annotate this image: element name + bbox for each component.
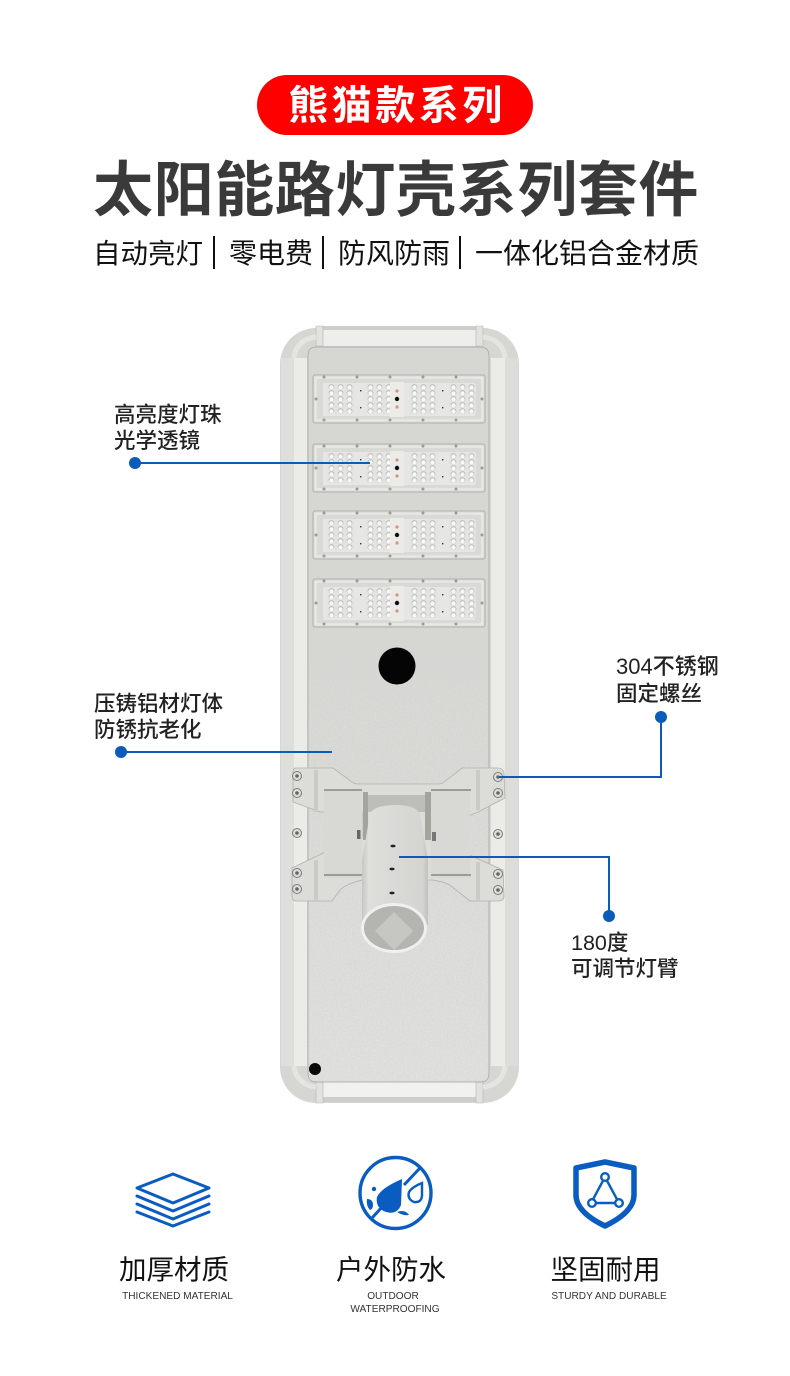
drain hole	[309, 1063, 321, 1075]
feature: sturdy and durable: 坚固耐用	[550, 1254, 660, 1285]
product: solar street light housing	[280, 326, 519, 1103]
title badge: 熊猫款系列: 熊猫款系列	[288, 84, 506, 128]
subtitle feature row: 零电费	[229, 238, 313, 269]
LED module 2	[313, 444, 485, 492]
callout: LED lens: 高亮度灯珠	[114, 403, 222, 427]
callout: stainless screws	[499, 654, 719, 777]
callout: stainless screws: 固定螺丝	[616, 682, 702, 706]
icon: no water	[360, 1158, 431, 1228]
feature: outdoor waterproofing: OUTDOOR	[367, 1291, 419, 1302]
feature: outdoor waterproofing	[336, 1158, 446, 1315]
light body frame	[280, 326, 519, 1103]
callout: LED lens	[114, 403, 370, 469]
callout: adjustable arm: 可调节灯臂	[571, 957, 679, 981]
title badge: 熊猫款系列	[257, 75, 533, 135]
callout: die-cast body	[94, 692, 332, 758]
icon: shield	[576, 1162, 634, 1226]
feature: thickened material	[119, 1174, 233, 1302]
subtitle feature row: 自动亮灯	[93, 238, 203, 269]
sensor hole	[378, 648, 416, 684]
LED module 3	[313, 511, 485, 559]
adjustable arm	[361, 792, 431, 953]
subtitle feature row: 防风防雨	[338, 238, 450, 269]
callout: die-cast body: 防锈抗老化	[94, 718, 202, 742]
LED module 1	[313, 375, 485, 423]
callout: die-cast body: 压铸铝材灯体	[94, 692, 224, 716]
feature: outdoor waterproofing: WATERPROOFING	[350, 1304, 440, 1315]
mounting bracket	[292, 768, 505, 901]
feature: thickened material: 加厚材质	[119, 1254, 229, 1285]
LED module 4	[313, 579, 485, 627]
feature: thickened material: THICKENED MATERIAL	[122, 1291, 233, 1302]
aluminium panel	[308, 347, 489, 1082]
callout: adjustable arm: 180度	[571, 931, 628, 955]
feature: sturdy and durable	[550, 1162, 667, 1302]
callout: adjustable arm	[399, 857, 679, 981]
subtitle feature row	[93, 236, 699, 269]
icon: layers	[137, 1174, 209, 1226]
callout: LED lens: 光学透镜	[114, 429, 200, 453]
subtitle feature row: 一体化铝合金材质	[475, 238, 699, 269]
main title: 太阳能路灯壳系列套件	[93, 157, 699, 224]
feature: outdoor waterproofing: 户外防水	[336, 1254, 446, 1285]
callout: stainless screws: 304不锈钢	[616, 654, 719, 679]
screws	[292, 772, 502, 894]
feature: sturdy and durable: STURDY AND DURABLE	[551, 1291, 667, 1302]
